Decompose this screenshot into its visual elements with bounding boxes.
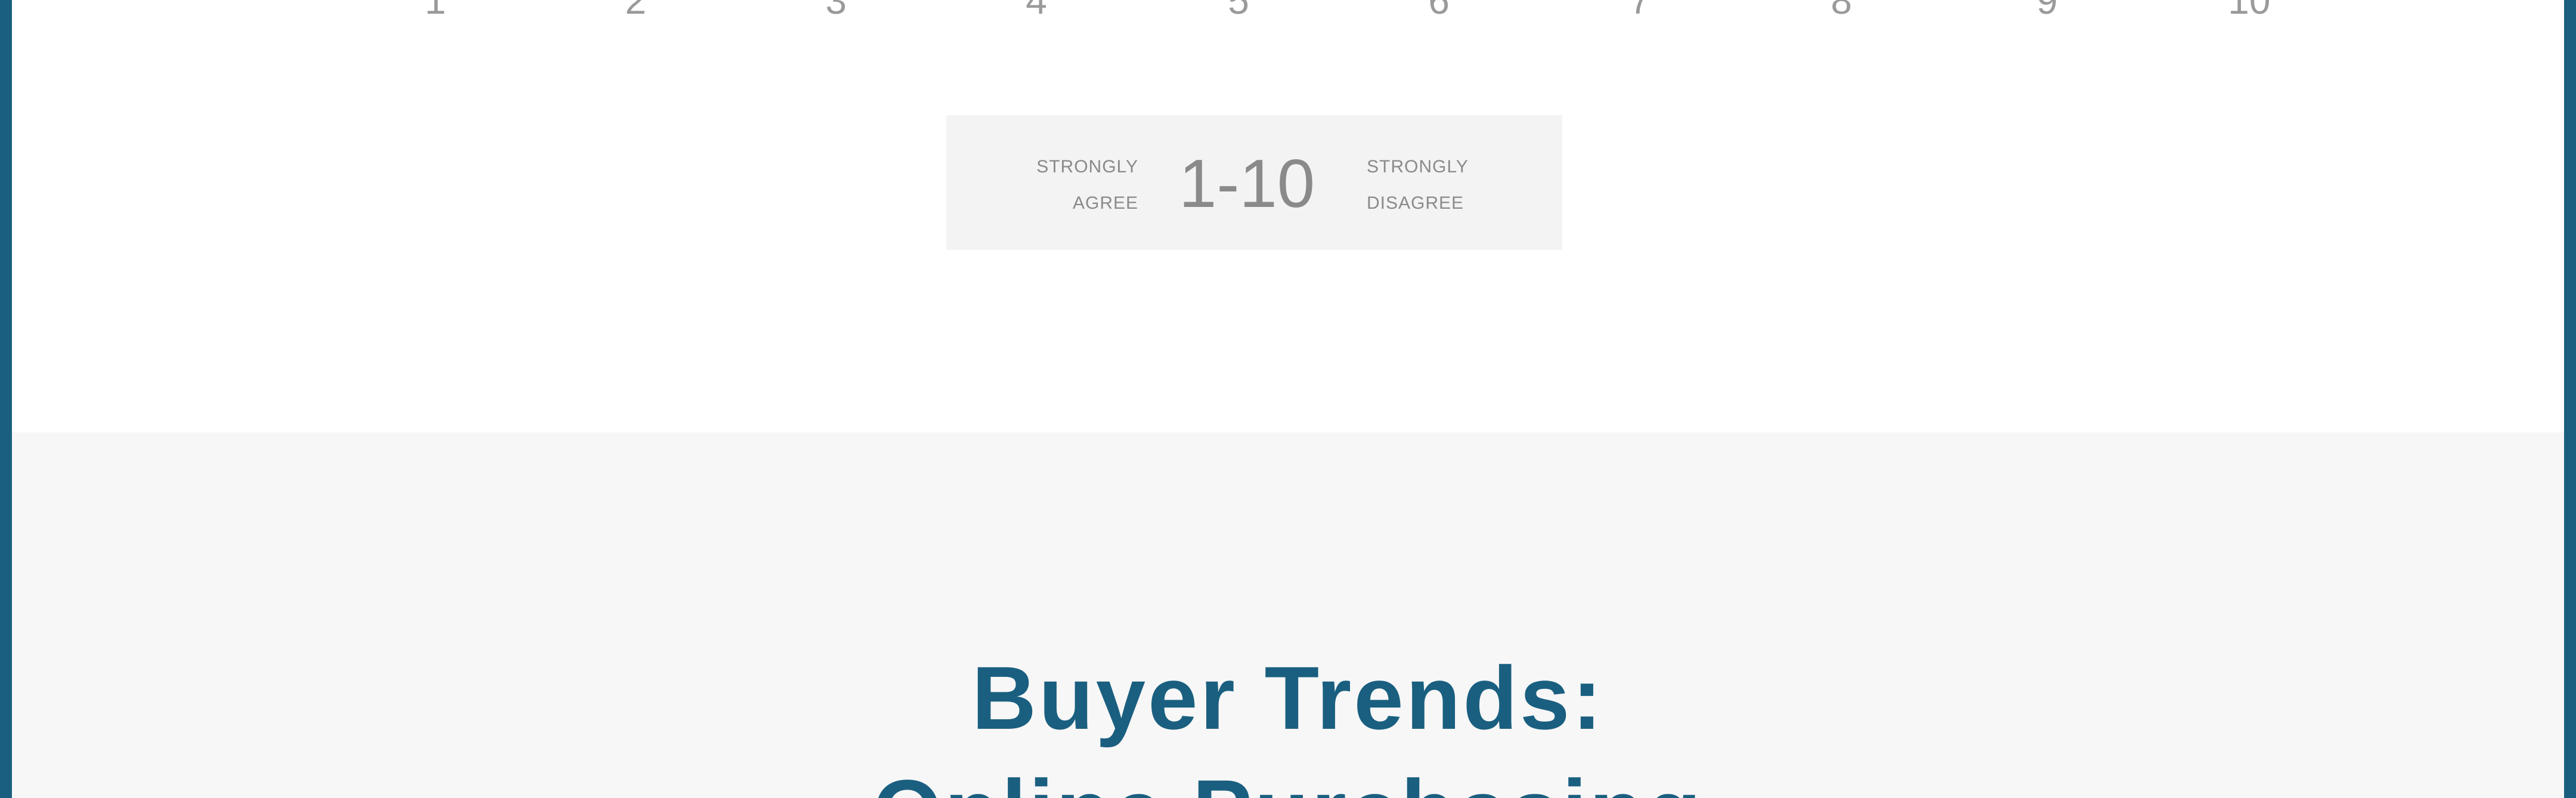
left border <box>0 0 12 798</box>
scale legend box <box>946 115 1562 250</box>
scale numbers <box>425 0 2271 21</box>
right border <box>2564 0 2576 798</box>
legend: strongly disagree: STRONGLY <box>1367 157 1469 177</box>
title <box>872 648 1704 798</box>
legend: strongly agree <box>1036 157 1138 213</box>
legend: strongly agree: AGREE <box>1073 193 1138 213</box>
legend: 1-10: 1-10 <box>1179 146 1315 222</box>
legend: strongly agree: STRONGLY <box>1036 157 1138 177</box>
title: Buyer Trends: <box>972 648 1604 748</box>
legend: strongly disagree <box>1367 157 1469 213</box>
gray lower section <box>0 432 2576 798</box>
legend: strongly disagree: DISAGREE <box>1367 193 1464 213</box>
